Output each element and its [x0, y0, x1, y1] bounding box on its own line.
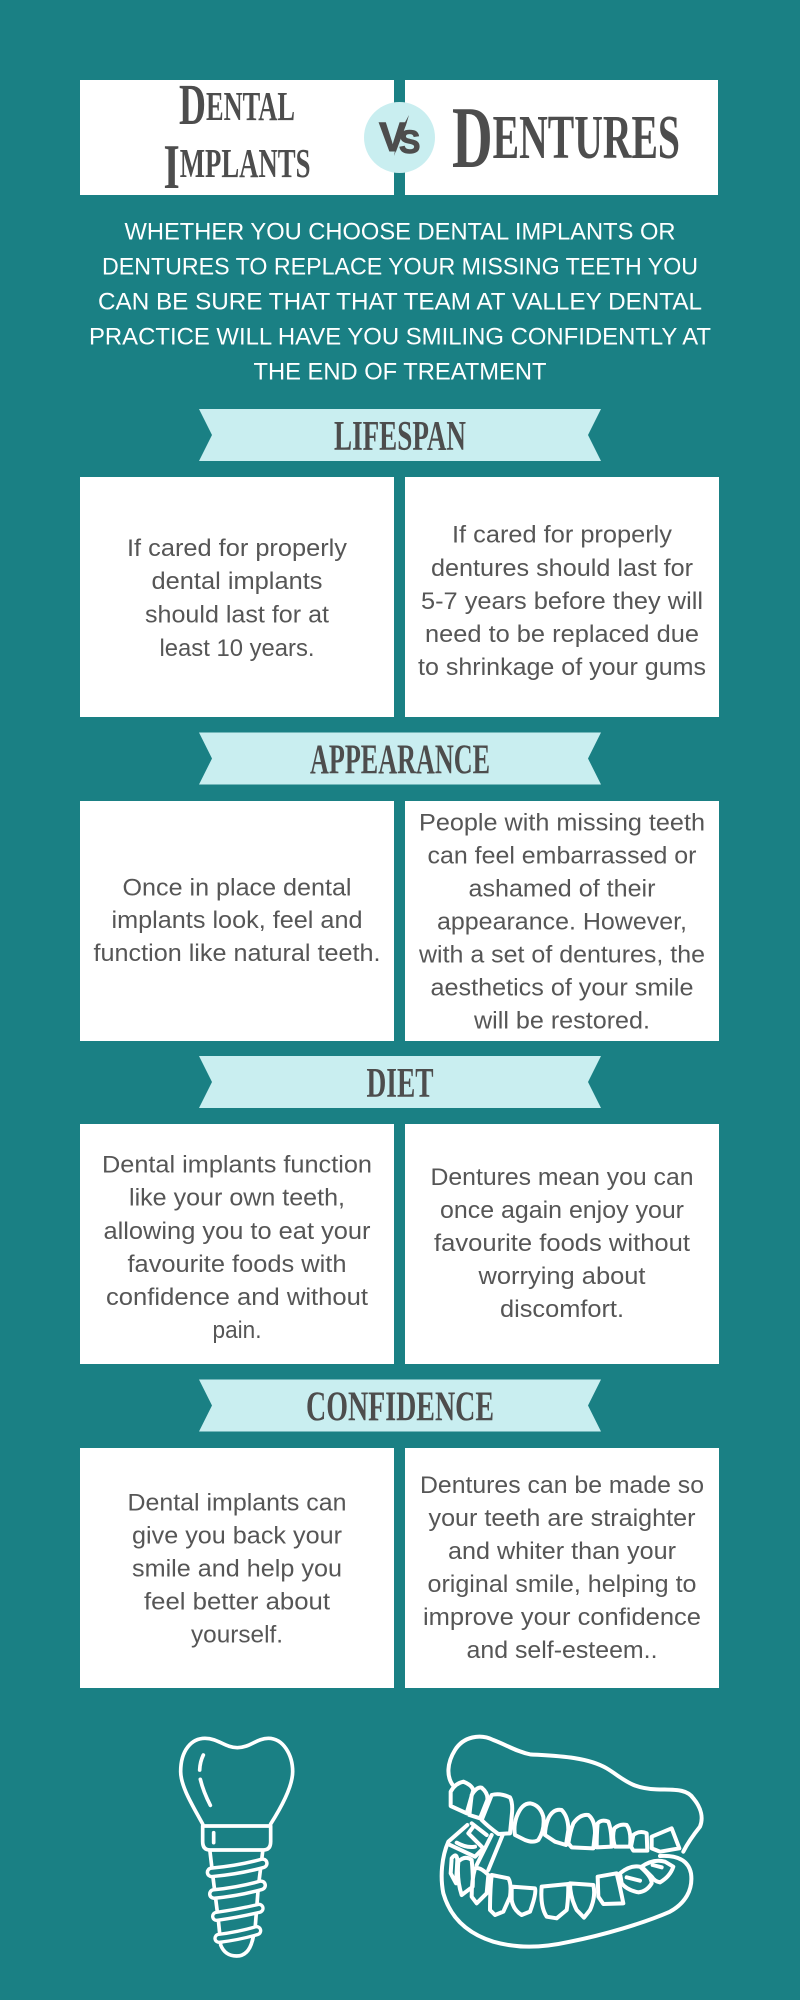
panel: appearance dentures: with a set of dentures, the — [418, 941, 705, 968]
icon: vs badge: S — [399, 124, 420, 160]
heading: Dentures: D — [452, 90, 493, 187]
panel: diet dentures: favourite foods without — [434, 1230, 690, 1257]
upper teeth — [451, 1782, 679, 1852]
icon: dentures — [442, 1737, 702, 1947]
panel: lifespan implants: least 10 years. — [160, 635, 314, 662]
panel: lifespan dentures: dentures should last for — [431, 555, 693, 582]
panel: diet dentures: Dentures mean you can — [430, 1164, 694, 1191]
heading: Dental Implants: mplants — [180, 125, 310, 190]
panel: lifespan implants: dental implants — [152, 568, 322, 595]
panel: lifespan dentures: to shrinkage of your gums — [418, 654, 706, 681]
panel: diet dentures: worrying about — [477, 1263, 646, 1290]
heading: Dental Implants: D — [179, 72, 206, 137]
section banner: Appearance: APPEARANCE — [310, 738, 490, 784]
panel: appearance implants: implants look, feel and — [112, 907, 362, 934]
panel: appearance dentures: aesthetics of your smile — [430, 974, 694, 1001]
section banner: Diet: DIET — [366, 1061, 434, 1107]
panel: confidence implants — [80, 1448, 394, 1688]
panel: confidence dentures: original smile, helping to — [428, 1571, 696, 1598]
intro text: WHETHER YOU CHOOSE DENTAL IMPLANTS OR — [124, 218, 676, 246]
panel: diet implants: allowing you to eat your — [104, 1218, 370, 1245]
intro text: CAN BE SURE THAT THAT TEAM AT VALLEY DENTAL — [98, 288, 702, 316]
panel: lifespan implants: If cared for properly — [127, 535, 348, 562]
icon: vs badge — [364, 102, 435, 173]
panel: lifespan dentures — [405, 477, 719, 717]
jaw hinge — [450, 1823, 503, 1870]
heading: Dental Implants: ental — [206, 68, 295, 133]
panel: confidence dentures: your teeth are straighter — [428, 1505, 696, 1532]
panel: confidence dentures: Dentures can be made so — [420, 1472, 704, 1499]
panel: confidence implants: smile and help you — [132, 1555, 342, 1582]
panel: diet dentures: discomfort. — [500, 1296, 624, 1323]
panel: confidence implants: yourself. — [191, 1621, 283, 1648]
panel: confidence implants: give you back your — [132, 1522, 342, 1549]
panel: diet implants — [80, 1124, 394, 1364]
panel: appearance dentures — [405, 801, 719, 1041]
panel: lifespan dentures: If cared for properly — [452, 521, 673, 548]
panel: appearance implants — [80, 801, 394, 1041]
intro text: PRACTICE WILL HAVE YOU SMILING CONFIDENTLY AT — [89, 324, 711, 350]
section banner: Lifespan — [199, 409, 601, 461]
panel: appearance implants: Once in place dental — [122, 874, 352, 901]
panel: appearance dentures: ashamed of their — [468, 875, 656, 902]
upper gum — [448, 1737, 702, 1852]
section banner: Appearance — [199, 732, 601, 784]
icon: vs badge: V — [379, 114, 407, 160]
panel: diet dentures: once again enjoy your — [440, 1197, 684, 1224]
panel: appearance dentures: can feel embarrassed or — [428, 842, 696, 869]
panel: lifespan implants: should last for at — [145, 601, 329, 628]
lower teeth — [451, 1855, 673, 1918]
screw threads — [212, 1863, 263, 1938]
icon: dental implant — [181, 1738, 293, 1956]
lower gum — [442, 1825, 691, 1947]
panel: appearance dentures: will be restored. — [473, 1007, 650, 1034]
panel: confidence dentures: improve your confidence — [423, 1604, 701, 1631]
panel: lifespan implants — [80, 477, 394, 717]
heading: Dentures: entures — [493, 81, 680, 178]
panel: confidence implants: feel better about — [144, 1588, 330, 1615]
panel: appearance dentures: appearance. However, — [437, 908, 687, 935]
panel: diet implants: like your own teeth, — [129, 1184, 345, 1211]
heading: Dental Implants: I — [164, 131, 180, 202]
section banner: Confidence — [199, 1380, 601, 1432]
panel: confidence dentures — [405, 1448, 719, 1688]
panel: diet implants: pain. — [212, 1317, 262, 1344]
section banner: Lifespan: LIFESPAN — [334, 414, 466, 460]
section banner: Confidence: CONFIDENCE — [306, 1384, 494, 1430]
panel: diet dentures — [405, 1124, 719, 1364]
panel: diet implants: Dental implants function — [102, 1151, 372, 1178]
panel: confidence implants: Dental implants can — [128, 1489, 346, 1516]
intro text: THE END OF TREATMENT — [254, 358, 547, 386]
panel: lifespan dentures: need to be replaced due — [425, 621, 699, 648]
title: header — [80, 68, 718, 202]
intro text: DENTURES TO REPLACE YOUR MISSING TEETH YOU — [102, 254, 698, 280]
intro text — [89, 218, 711, 386]
panel: diet implants: confidence and without — [106, 1284, 368, 1311]
heading: Dental Implants — [164, 68, 310, 202]
panel: confidence dentures: and whiter than your — [448, 1538, 676, 1565]
panel: appearance implants: function like natural teeth. — [94, 940, 380, 967]
panel: appearance dentures: People with missing teeth — [419, 809, 705, 836]
panel: confidence dentures: and self-esteem.. — [466, 1637, 658, 1664]
section banner: Diet — [199, 1056, 601, 1108]
panel: lifespan dentures: 5-7 years before they will — [421, 588, 703, 615]
panel: diet implants: favourite foods with — [128, 1251, 346, 1278]
